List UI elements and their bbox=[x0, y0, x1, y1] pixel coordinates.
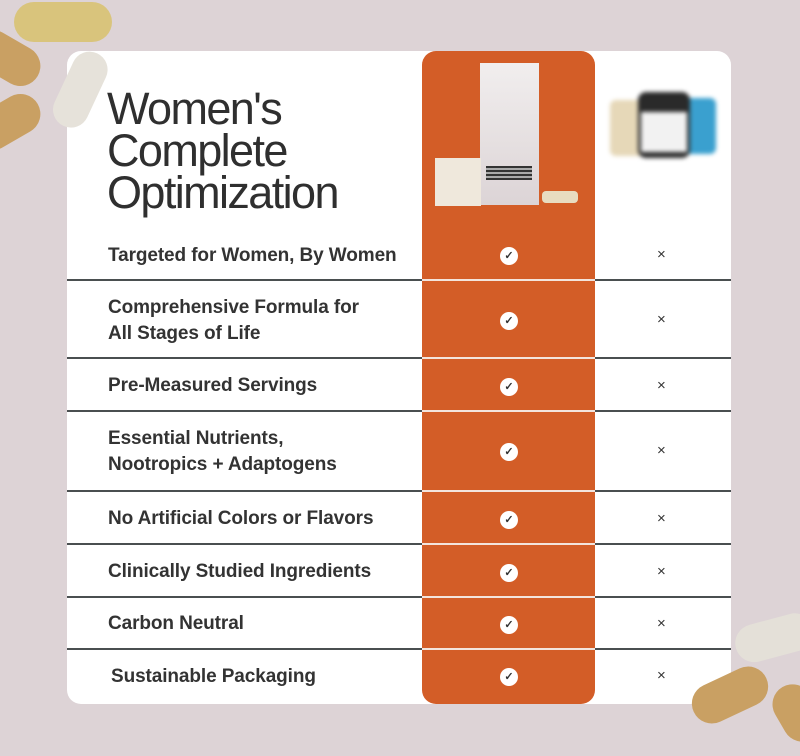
row 2: ✓ bbox=[504, 315, 514, 327]
white card bbox=[67, 51, 731, 704]
row 3: Pre-Measured Servings bbox=[108, 375, 317, 396]
row 6: Clinically Studied Ingredients bbox=[108, 561, 371, 582]
row 4: Nootropics + Adaptogens bbox=[108, 454, 337, 475]
row 2: Comprehensive Formula for bbox=[108, 297, 359, 318]
row 4: ✓ bbox=[504, 446, 514, 458]
row 1: ✓ bbox=[504, 250, 514, 262]
row 5 bbox=[108, 508, 666, 529]
row 6: × bbox=[657, 563, 666, 580]
row 8 bbox=[111, 666, 666, 687]
row 7: ✓ bbox=[504, 619, 514, 631]
competitor image: bottles bbox=[608, 88, 720, 162]
row 8: Sustainable Packaging bbox=[111, 666, 316, 687]
row 4: × bbox=[657, 442, 666, 459]
row 1: × bbox=[657, 246, 666, 263]
row 4: Essential Nutrients, bbox=[108, 428, 283, 449]
orange highlight column bbox=[422, 51, 595, 704]
row 2: All Stages of Life bbox=[108, 323, 260, 344]
product image: box bbox=[435, 63, 578, 206]
row 3: ✓ bbox=[504, 381, 514, 393]
separators bbox=[67, 279, 731, 281]
row 7: × bbox=[657, 615, 666, 632]
row 1 bbox=[108, 245, 666, 266]
decorative pills bottom-right bbox=[692, 614, 800, 742]
row 5: No Artificial Colors or Flavors bbox=[108, 508, 373, 529]
row 5: × bbox=[657, 510, 666, 527]
title: Women's bbox=[107, 83, 281, 134]
row 3: × bbox=[657, 377, 666, 394]
row 4 bbox=[108, 428, 666, 475]
row 3 bbox=[108, 375, 666, 396]
row 7: Carbon Neutral bbox=[108, 613, 244, 634]
row 7 bbox=[108, 613, 666, 634]
decorative pills top-left bbox=[0, 2, 112, 149]
row 2 bbox=[108, 297, 666, 344]
title bbox=[107, 83, 338, 218]
row 6 bbox=[108, 561, 666, 582]
row 6: ✓ bbox=[504, 567, 514, 579]
row 8: ✓ bbox=[504, 671, 514, 683]
row 1: Targeted for Women, By Women bbox=[108, 245, 397, 266]
title: Optimization bbox=[107, 167, 338, 218]
title: Complete bbox=[107, 125, 287, 176]
row 2: × bbox=[657, 311, 666, 328]
row 5: ✓ bbox=[504, 514, 514, 526]
row 8: × bbox=[657, 667, 666, 684]
